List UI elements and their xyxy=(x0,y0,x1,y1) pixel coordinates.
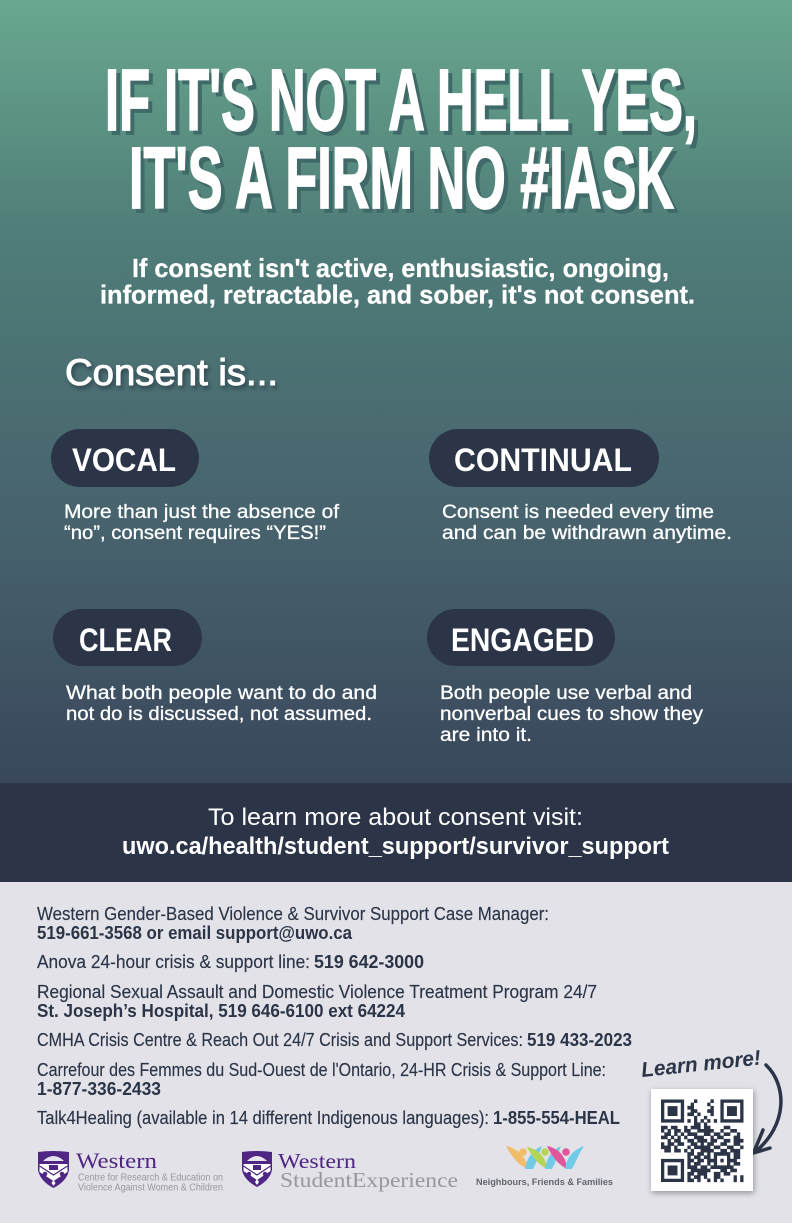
text: contact list: 519 642-3000 xyxy=(314,951,424,972)
panel: continual xyxy=(429,429,732,544)
logo: Western Student Experience: Western xyxy=(278,1149,356,1173)
icon: Western shield xyxy=(38,1151,69,1188)
text: contact list: 519-661-3568 or email support@uwo.ca xyxy=(37,922,353,943)
text: contact list xyxy=(37,903,632,1128)
logo: Western Student Experience: StudentExperience xyxy=(280,1168,458,1192)
pill: continual xyxy=(429,429,659,487)
subtitle: informed, retractable, and sober, it's not consent. xyxy=(100,280,695,310)
logo: Western Student Experience xyxy=(242,1149,458,1192)
pill: clear: CLEAR xyxy=(79,622,172,658)
text: contact list: Western Gender-Based Violence & Survivor Support Case Manager: xyxy=(37,903,549,924)
text: contact list: St. Joseph’s Hospital, 519 646-6100 ext 64224 xyxy=(37,1000,406,1021)
icon: Western shield xyxy=(242,1151,272,1187)
text: continual description: Consent is needed every time xyxy=(442,502,714,523)
text: clear description xyxy=(66,683,377,725)
logo: Western Centre for Research & Education xyxy=(38,1148,223,1194)
text: contact list: Anova 24-hour crisis & support line: xyxy=(37,951,310,972)
text: clear description: not do is discussed, not assumed. xyxy=(66,704,372,725)
pill: engaged xyxy=(427,609,615,666)
QR code xyxy=(651,1089,753,1191)
text: continual description: and can be withdrawn anytime. xyxy=(442,523,732,544)
panel: contacts background xyxy=(0,882,792,1223)
logo: Western Centre for Research & Education: Western xyxy=(76,1148,157,1173)
panel: learn more band xyxy=(0,783,792,882)
subtitle: If consent isn't active, enthusiastic, ongoing, xyxy=(132,253,669,283)
logo: Western Centre for Research & Education: Violence Against Women & Children xyxy=(78,1182,223,1194)
logo: Neighbours, Friends & Families: Neighbours, Friends & Families xyxy=(476,1177,613,1188)
text: contact list: 1-855-554-HEAL xyxy=(493,1107,620,1128)
text: engaged description: nonverbal cues to show they xyxy=(440,704,704,725)
text: vocal description: More than just the absence of xyxy=(64,502,340,523)
text: contact list: Regional Sexual Assault and Domestic Violence Treatment Program 24/7 xyxy=(37,981,597,1002)
text: contact list: 1-877-336-2433 xyxy=(37,1078,161,1099)
text: contact list: 519 433-2023 xyxy=(527,1029,632,1050)
text: continual description xyxy=(442,502,732,544)
text: engaged description: are into it. xyxy=(440,725,532,746)
panel: vocal xyxy=(51,429,340,544)
pill: vocal: VOCAL xyxy=(72,442,176,478)
text: vocal description: “no”, consent requires “YES!” xyxy=(64,523,326,544)
handwritten label: Learn more!: Learn more! xyxy=(640,1047,762,1082)
text: vocal description xyxy=(64,502,340,544)
pill: clear xyxy=(53,609,202,666)
text: contact list: Talk4Healing (available in 14 different Indigenous languages): xyxy=(37,1107,489,1128)
panel: clear xyxy=(53,609,377,725)
pill: continual: CONTINUAL xyxy=(454,442,632,478)
text: engaged description xyxy=(440,683,704,746)
text: clear description: What both people want to do and xyxy=(66,683,377,704)
heading: Consent is...: Consent is... xyxy=(65,352,278,393)
pill: vocal xyxy=(51,429,199,487)
panel: gradient background xyxy=(0,0,792,783)
panel: learn more band: To learn more about consent visit: xyxy=(208,804,583,831)
panel: learn more band: uwo.ca/health/student_support/survivor_support xyxy=(122,833,669,860)
title xyxy=(105,52,697,227)
logo: Neighbours, Friends & Families xyxy=(476,1146,613,1188)
icon: three raised-arm figures xyxy=(506,1146,584,1169)
panel: engaged xyxy=(427,609,704,746)
pill: engaged: ENGAGED xyxy=(451,622,594,658)
logo: Western Centre for Research & Education: Centre for Research & Education on xyxy=(78,1172,223,1184)
arrow to QR code xyxy=(754,1065,781,1153)
subtitle xyxy=(100,253,695,310)
text: contact list: CMHA Crisis Centre & Reach Out 24/7 Crisis and Support Services: xyxy=(37,1029,523,1050)
text: contact list: Carrefour des Femmes du Sud-Ouest de l'Ontario, 24-HR Crisis & Support Line: xyxy=(37,1059,606,1080)
text: engaged description: Both people use verbal and xyxy=(440,683,692,704)
